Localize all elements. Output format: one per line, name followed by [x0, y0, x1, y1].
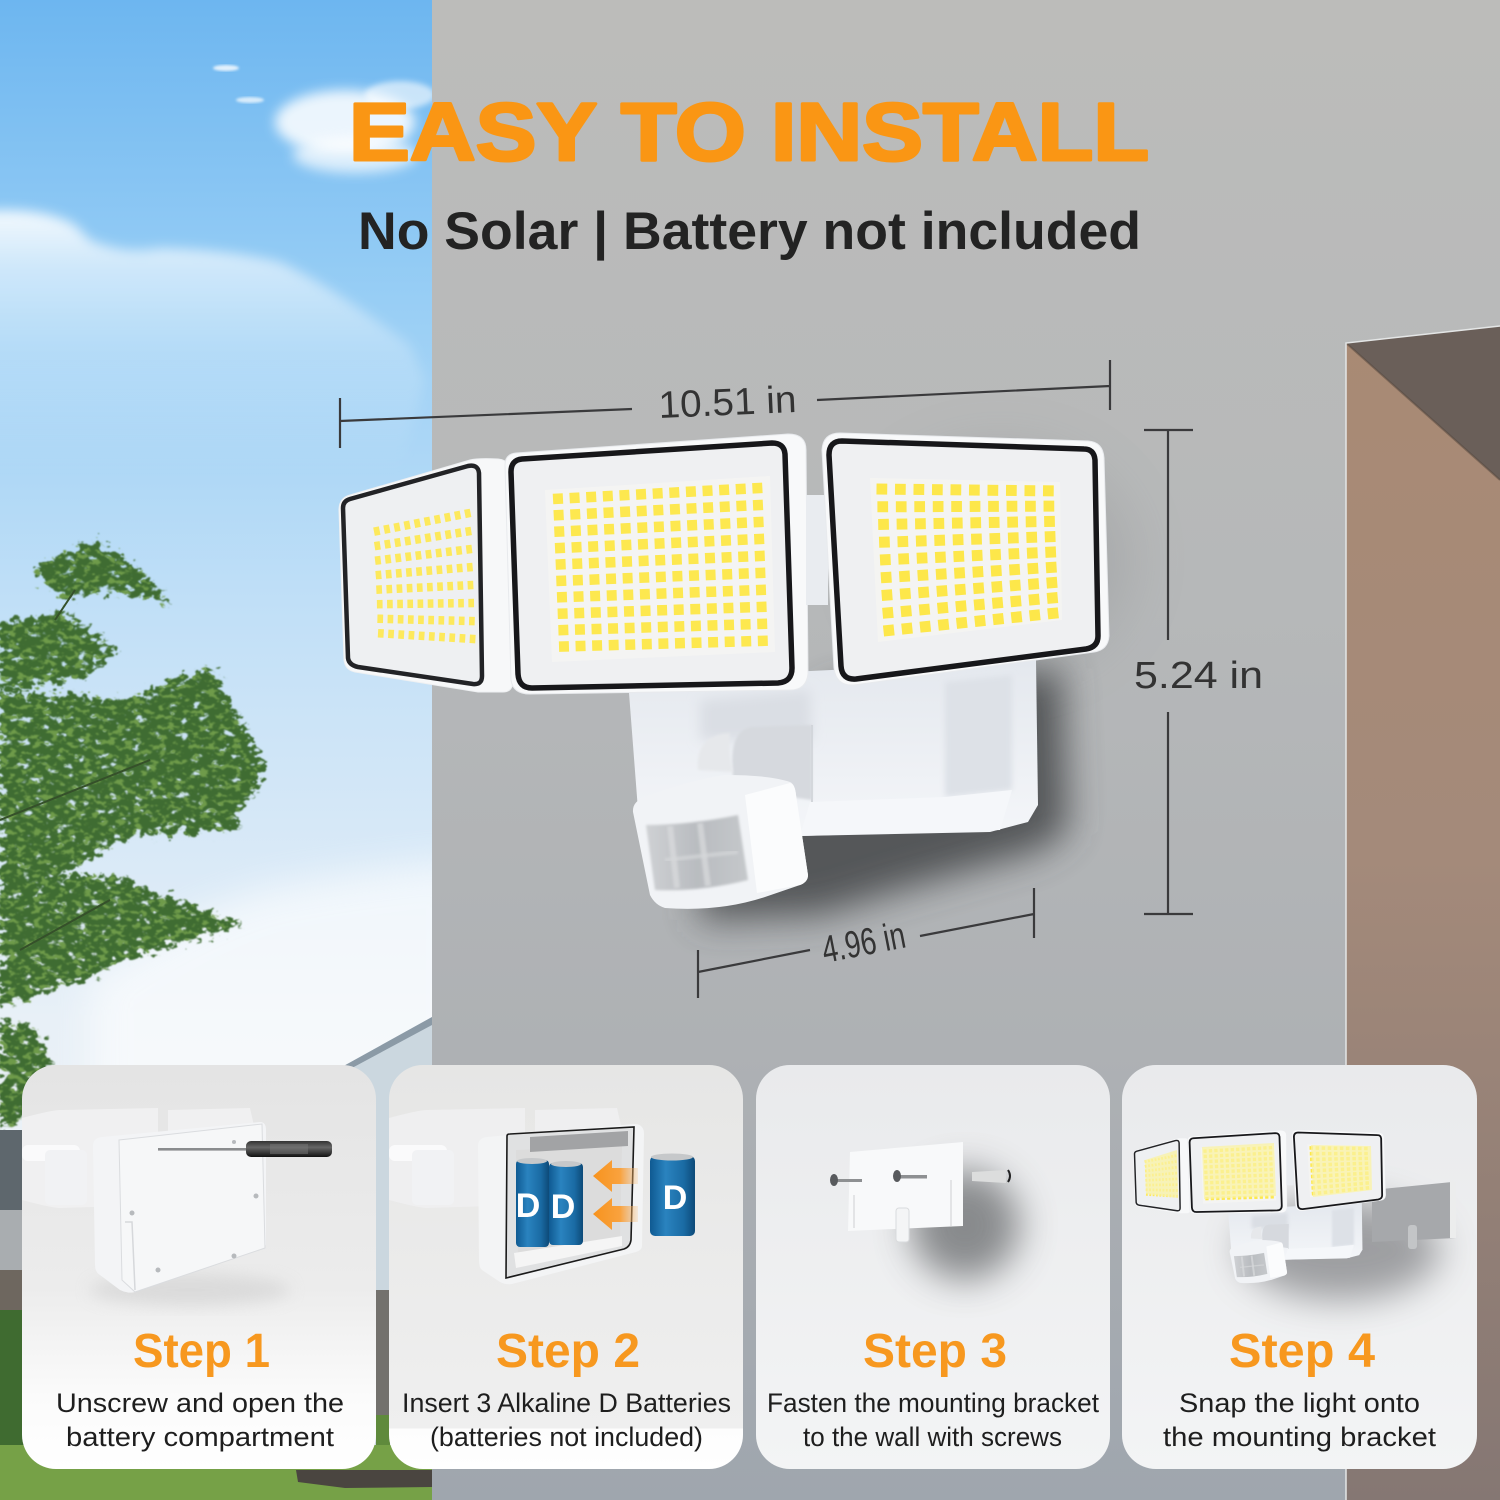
dimension: depth 4.96 in: [698, 888, 1034, 998]
step label: Step 2: [496, 1325, 640, 1378]
step description: the mounting bracket: [1163, 1422, 1437, 1452]
dimension: width 10.51 in: 10.51 in: [658, 379, 797, 427]
step description: Insert 3 Alkaline D Batteries: [402, 1388, 731, 1418]
lawn: [0, 1445, 432, 1500]
stone planter: [296, 1470, 432, 1488]
right light head: [822, 433, 1109, 685]
neighbouring house: [0, 1017, 432, 1470]
step description: [767, 1388, 1099, 1452]
step description: [402, 1388, 731, 1452]
dimension: height 5.24 in: 5.24 in: [1134, 655, 1263, 697]
card: step 1: [22, 1065, 376, 1469]
mounting body: [628, 660, 1038, 836]
batteries: D: [663, 1179, 687, 1217]
dimension: depth 4.96 in: 4.96 in: [818, 915, 909, 972]
wall shadow: [700, 450, 1130, 920]
step label: Step 1: [133, 1325, 270, 1378]
card: step 2: [389, 1065, 743, 1469]
step description: Snap the light onto: [1179, 1388, 1420, 1418]
step label: Step 4: [1229, 1325, 1375, 1378]
step description: Fasten the mounting bracket: [767, 1388, 1099, 1418]
title: EASY TO INSTALL: [349, 87, 1149, 178]
arrows: [593, 1160, 638, 1230]
LEDs: [876, 489, 1066, 631]
step description: to the wall with screws: [803, 1422, 1062, 1452]
icon: open battery compartment: [389, 1108, 695, 1284]
card: step 3: [756, 1065, 1110, 1469]
sky background: [0, 0, 470, 1500]
icon: light back with screwdriver: [22, 1108, 332, 1306]
step description: [56, 1388, 344, 1452]
batteries: D: [516, 1187, 540, 1225]
tree foliage: [0, 540, 268, 1130]
batteries: D: [551, 1188, 575, 1226]
LEDs: [374, 512, 480, 639]
step description: battery compartment: [66, 1422, 335, 1452]
swivel between heads: [806, 495, 828, 605]
centre light head: [505, 434, 808, 694]
step description: Unscrew and open the: [56, 1388, 344, 1418]
product: three-head light: [339, 433, 1109, 909]
icon: light snapping onto bracket: [1133, 1130, 1456, 1300]
step label: Step 3: [863, 1325, 1007, 1378]
LEDs: [553, 488, 774, 647]
card: step 4: [1122, 1065, 1477, 1469]
step description: [1163, 1388, 1437, 1452]
recessed doorway: [1346, 326, 1500, 1500]
left light head: [339, 459, 513, 692]
motion sensor: [633, 775, 808, 909]
wall: [432, 0, 1500, 1500]
dimension: height 5.24 in: [1134, 430, 1263, 914]
clouds: [0, 65, 470, 1120]
batteries: [516, 1154, 695, 1247]
icon: mounting bracket and screws: [830, 1142, 1020, 1280]
dimension: width 10.51 in: [340, 360, 1110, 448]
step description: (batteries not included): [430, 1422, 703, 1452]
subtitle: No Solar | Battery not included: [358, 202, 1141, 262]
